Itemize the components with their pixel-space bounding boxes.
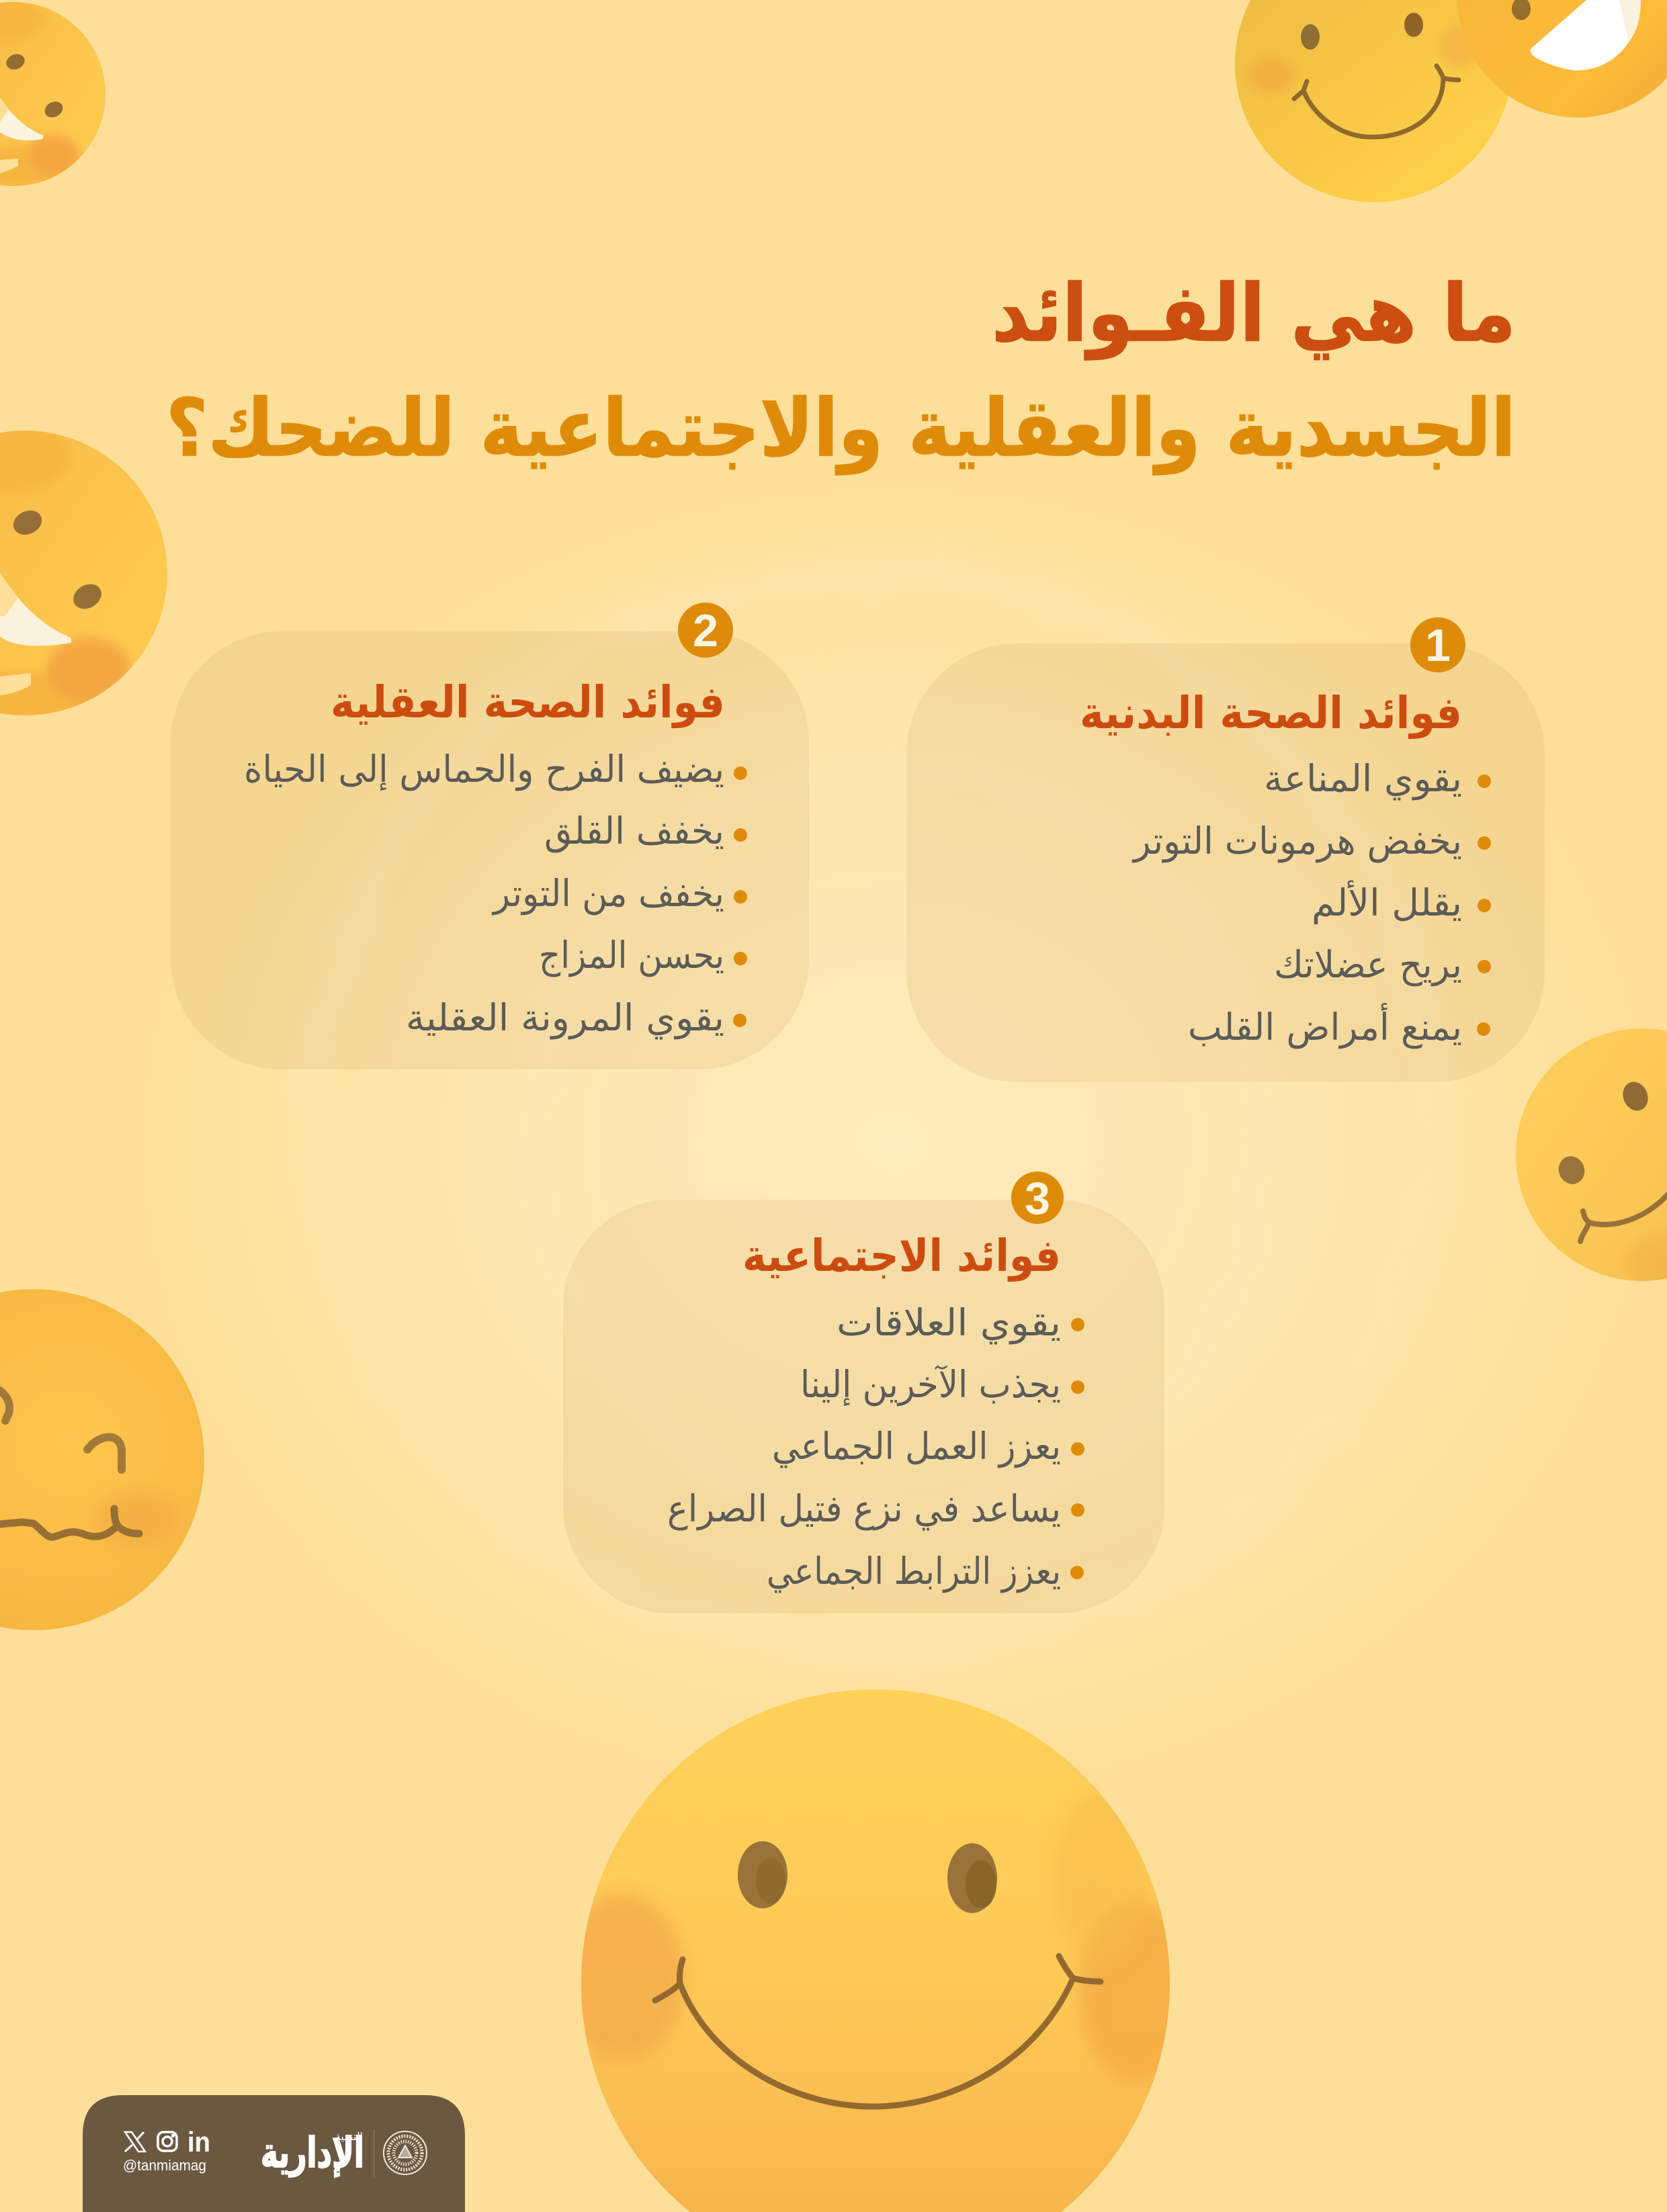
heading: فوائد الصحة العقلية: [331, 676, 725, 729]
icon: LinkedIn: in: [187, 2126, 210, 2158]
badge 1: 1: [1425, 620, 1451, 671]
icon: X: [125, 2132, 145, 2152]
heading: فوائد الصحة البدنية: [1080, 687, 1462, 740]
list: يريح عضلاتك: [1274, 943, 1462, 987]
list: يقوي المرونة العقلية: [406, 996, 724, 1040]
badge 2: [678, 603, 733, 658]
list: يقوي العلاقات: [837, 1301, 1061, 1344]
badge 3: [1011, 1171, 1064, 1224]
badge 2: 2: [693, 605, 718, 656]
list: يجذب الآخرين إلينا: [800, 1363, 1061, 1407]
list: يساعد في نزع فتيل الصراع: [667, 1487, 1061, 1531]
handle: @tanmiamag: [123, 2157, 206, 2174]
footer bar: [83, 2095, 465, 2212]
panel: mental health benefits: [171, 603, 809, 1069]
soft light swirl behind the panels: [121, 470, 1666, 1814]
smiley: right middle: [1516, 1028, 1667, 1290]
list: [667, 1301, 1084, 1593]
list: [1131, 757, 1491, 1049]
list: يحسن المزاج: [539, 934, 724, 977]
icon: Instagram: [158, 2132, 177, 2151]
smiley: top right large: [1235, 0, 1512, 202]
list: يخفض هرمونات التوتر: [1131, 820, 1462, 863]
list: يمنع أمراض القلب: [1188, 1003, 1462, 1049]
title line 1: ما هي الفـوائد: [992, 267, 1516, 360]
title: [166, 267, 1516, 475]
badge 1: [1410, 617, 1465, 672]
list: [244, 748, 747, 1040]
list: يعزز الترابط الجماعي: [767, 1550, 1061, 1593]
list: يعزز العمل الجماعي: [772, 1425, 1061, 1468]
list: يقوي المناعة: [1264, 757, 1462, 800]
smiley: top left: [0, 0, 105, 188]
list: يضيف الفرح والحماس إلى الحياة: [244, 748, 724, 791]
list: يخفف القلق: [544, 809, 724, 853]
smiley: bottom large: [558, 1689, 1193, 2212]
title line 2: الجسدية والعقلية والاجتماعية للضحك؟: [166, 382, 1516, 475]
logo wordmark: الإدارية: [261, 2128, 364, 2177]
panel: physical health benefits: [906, 617, 1545, 1082]
list: يخفف من التوتر: [491, 872, 724, 915]
panel: social benefits: [563, 1171, 1164, 1613]
list: يقلل الألم: [1312, 880, 1462, 924]
badge 3: 3: [1025, 1173, 1050, 1224]
logo wordmark: التنمية: [335, 2130, 363, 2143]
logo emblem: [384, 2131, 427, 2174]
heading: فوائد الاجتماعية: [742, 1230, 1061, 1282]
smiley: top right corner: [1457, 0, 1667, 118]
smiley: left lower: [0, 1289, 204, 1630]
smiley: left middle: [0, 423, 167, 725]
